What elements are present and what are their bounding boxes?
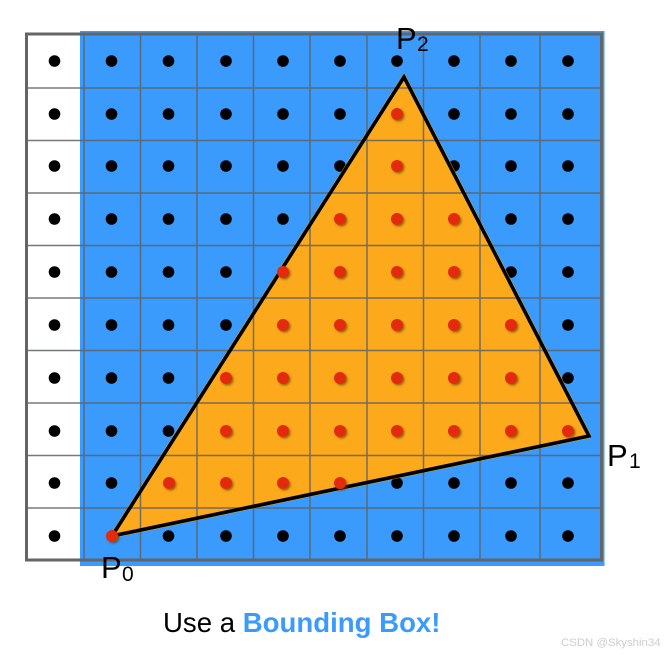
black sample dots: outside triangle — [49, 55, 574, 542]
pixel grid — [26, 34, 602, 560]
watermark: CSDN @Skyshin34 — [561, 637, 661, 649]
vertex label P0: 0 — [122, 563, 134, 586]
vertex label P1: P — [607, 438, 628, 473]
red sample dots: inside triangle — [106, 108, 574, 542]
triangle outline — [112, 77, 589, 536]
vertex label P2 — [396, 21, 429, 56]
vertex label P0: P — [101, 550, 122, 585]
vertex label P1: 1 — [629, 450, 641, 473]
vertex label P1 — [607, 438, 641, 473]
vertex label P2: 2 — [417, 33, 429, 56]
vertex label P2: P — [396, 21, 417, 56]
caption: Use a Bounding Box! — [163, 607, 440, 638]
bounding box: blue rectangle — [80, 31, 604, 566]
triangle fill — [112, 77, 589, 536]
vertex label P0 — [101, 550, 134, 586]
